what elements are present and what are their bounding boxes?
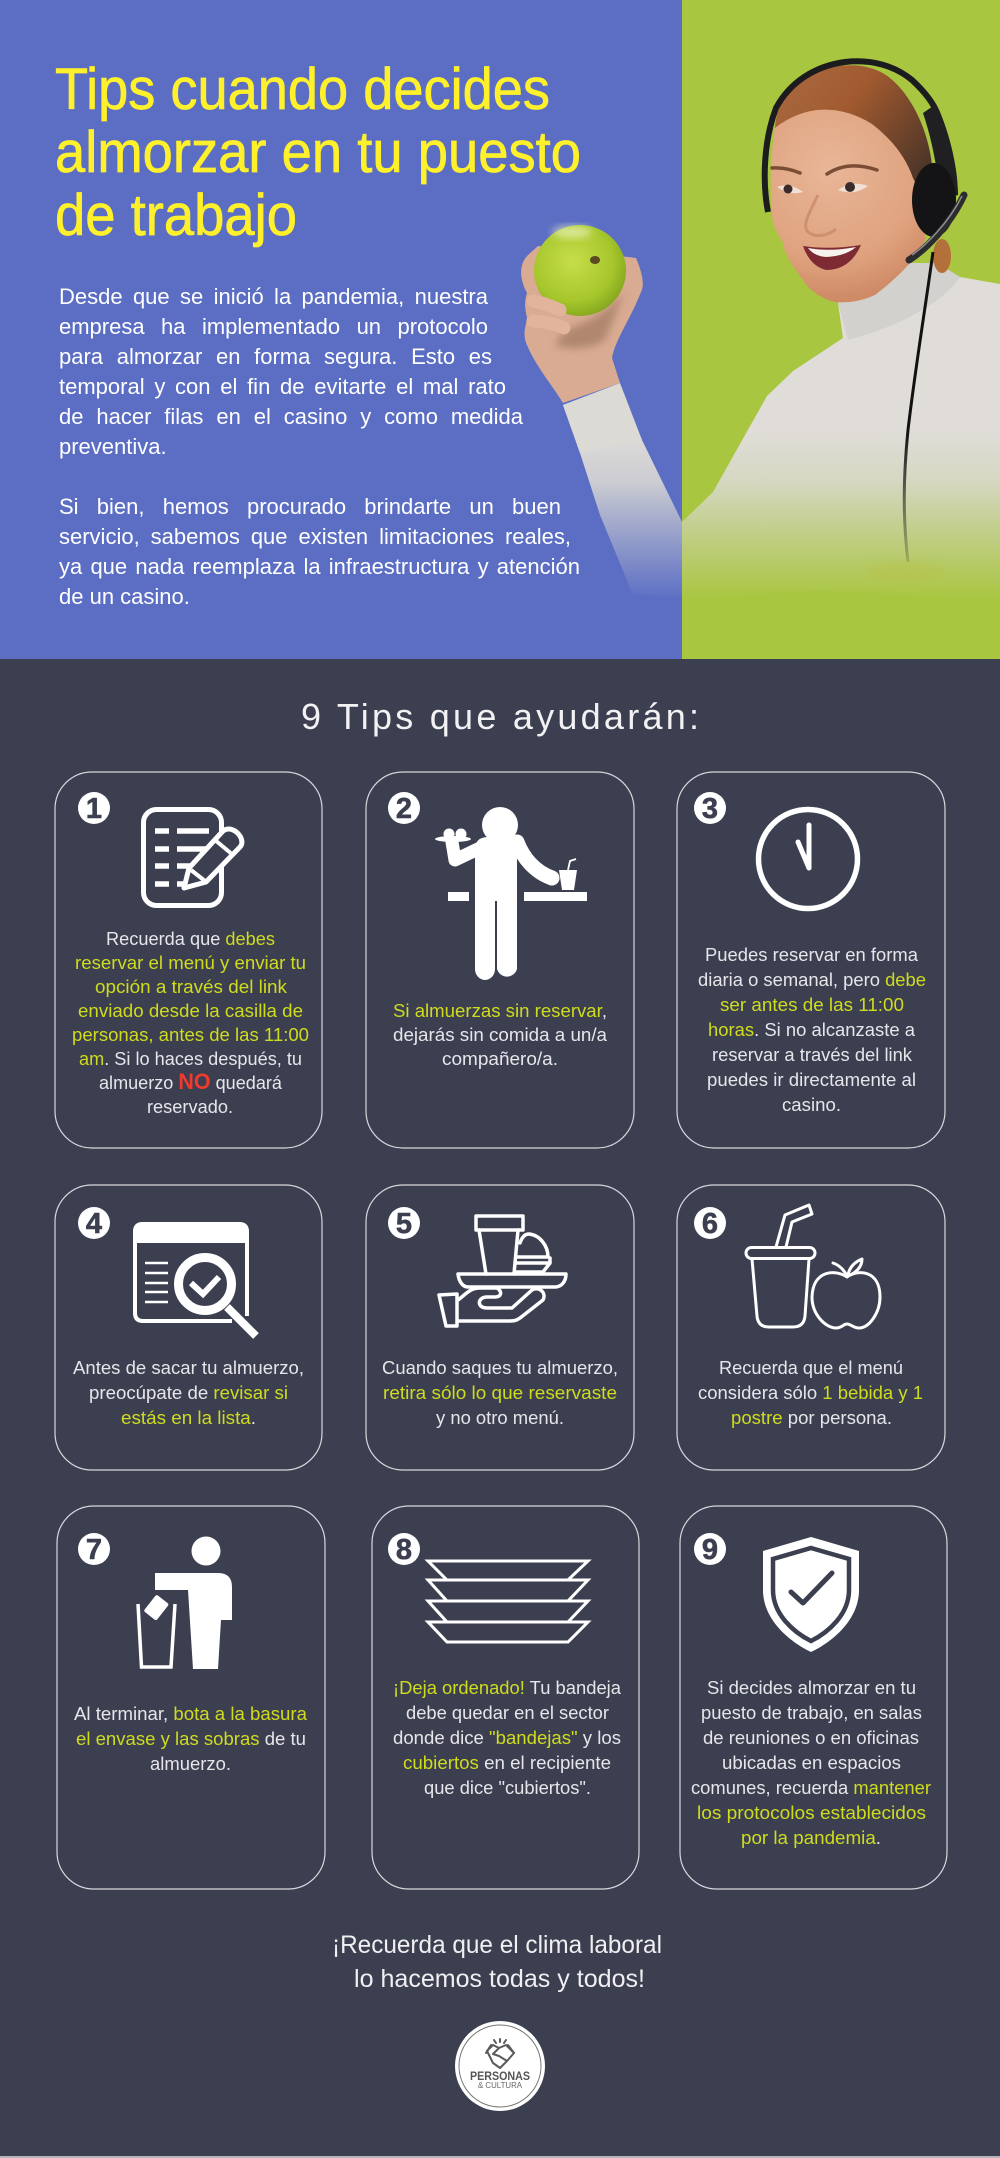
- panel: tip 2: [366, 772, 634, 1148]
- text: tip 9: los protocolos establecidos: [697, 1802, 926, 1823]
- faded hand: [863, 562, 947, 582]
- text: tip 6: [698, 1357, 923, 1428]
- text: tip 1: opción a través del link: [95, 976, 288, 997]
- text: tip 8: que dice "cubiertos".: [424, 1777, 591, 1798]
- face: [771, 105, 925, 302]
- badge: number 8: [388, 1533, 420, 1566]
- hair bun: [933, 239, 951, 273]
- badge: number 9: 9: [702, 1534, 718, 1566]
- badge: number 1: [78, 792, 110, 825]
- text: tip 9: por la pandemia.: [741, 1827, 881, 1848]
- apple: [534, 225, 626, 316]
- text: tip 1: reservado.: [147, 1096, 233, 1117]
- text: tip 4: [73, 1357, 304, 1428]
- closing message: ¡Recuerda que el clima laboral: [332, 1931, 662, 1959]
- panel: tip 1: [55, 772, 322, 1148]
- intro paragraph one: empresa ha implementado un protocolo: [59, 314, 488, 339]
- text: tip 6: postre por persona.: [731, 1407, 892, 1428]
- panel: hero blue background: [0, 0, 682, 659]
- heading: 9 tips: 9 Tips que ayudarán:: [301, 696, 699, 737]
- title: [55, 57, 581, 248]
- icon: shield with check: [763, 1537, 859, 1652]
- badge: number 2: 2: [396, 793, 412, 825]
- badge: number 2: [388, 792, 420, 825]
- text: tip 8: [393, 1677, 622, 1798]
- turtleneck: [838, 263, 960, 340]
- text: tip 7: [74, 1703, 308, 1774]
- badge: number 5: [388, 1207, 420, 1240]
- photo: woman with headset holding apple: [521, 61, 1000, 600]
- text: tip 3: ser antes de las 11:00: [720, 994, 904, 1015]
- text: tip 7: el envase y las sobras de tu: [76, 1728, 306, 1749]
- icon: window with magnifier: [133, 1222, 256, 1336]
- text: tip 9: ubicadas en espacios: [722, 1752, 901, 1773]
- text: tip 3: horas. Si no alcanzaste a: [708, 1019, 916, 1040]
- text: tip 1: almuerzo NO quedará: [99, 1069, 283, 1094]
- closing message: lo hacemos todas y todos!: [354, 1965, 645, 1993]
- eyebrows: [772, 166, 877, 174]
- text: tip 1: Recuerda que debes: [106, 928, 275, 949]
- text: tip 2: dejarás sin comida a un/a: [393, 1024, 608, 1045]
- panel: tip 3: [677, 772, 945, 1148]
- closing message: [332, 1931, 662, 1993]
- eye right: [838, 182, 868, 192]
- text: tip 9: Si decides almorzar en tu: [707, 1677, 916, 1698]
- sleeve cuff: [563, 383, 642, 453]
- fingers: [533, 301, 564, 328]
- icon: handshake: [486, 2039, 514, 2068]
- badge: number 9: [694, 1533, 726, 1566]
- badge: number 4: [78, 1207, 110, 1240]
- badge: number 3: 3: [702, 793, 718, 825]
- text: tip 4: Antes de sacar tu almuerzo,: [73, 1357, 304, 1378]
- text: tip 3: reservar a través del link: [712, 1044, 913, 1065]
- icon: clock: [758, 810, 858, 908]
- badge: number 7: [78, 1533, 110, 1566]
- intro paragraph one: de hacer filas en el casino y como medida: [59, 404, 523, 429]
- text: tip 5: y no otro menú.: [436, 1407, 564, 1428]
- text: tip 8: ¡Deja ordenado! Tu bandeja: [393, 1677, 622, 1698]
- hand: [521, 246, 643, 403]
- intro paragraph one: para almorzar en forma segura. Esto es: [59, 344, 492, 369]
- text: tip 3: casino.: [782, 1094, 841, 1115]
- text: tip 1: am. Si lo haces después, tu: [79, 1048, 302, 1069]
- text: tip 1: reservar el menú y enviar tu: [75, 952, 306, 973]
- panel: tip 6: [677, 1185, 945, 1470]
- text: tip 1: personas, antes de las 11:00: [72, 1024, 309, 1045]
- badge: number 8: 8: [396, 1534, 412, 1566]
- intro paragraph two: [59, 494, 580, 609]
- intro paragraph two: ya que nada reemplaza la infraestructura y atención: [59, 554, 580, 579]
- mic boom: [909, 195, 964, 260]
- panel: tip 9: [680, 1506, 947, 1889]
- logo: Personas y Cultura: [455, 2021, 545, 2111]
- text: tip 2: compañero/a.: [442, 1048, 558, 1069]
- logo: Personas y Cultura: PERSONAS: [470, 2071, 530, 2083]
- icon: waiter with tray and cup: [435, 807, 587, 980]
- text: tip 1: [72, 928, 309, 1117]
- text: tip 8: donde dice "bandejas" y los: [393, 1727, 621, 1748]
- headband thick right part: [923, 104, 958, 200]
- text: tip 3: puedes ir directamente al: [707, 1069, 916, 1090]
- icon: stacked trays: [428, 1561, 588, 1642]
- text: tip 3: [698, 944, 926, 1115]
- apple dimple: [590, 256, 600, 264]
- title: Tips cuando decides: [55, 57, 550, 122]
- title: de trabajo: [55, 183, 297, 248]
- badge: number 6: 6: [702, 1208, 718, 1240]
- icon: person throwing trash in bin: [138, 1536, 232, 1669]
- teeth: [808, 247, 856, 257]
- text: tip 5: Cuando saques tu almuerzo,: [382, 1357, 618, 1378]
- intro paragraph one: preventiva.: [59, 434, 167, 459]
- badge: number 4: 4: [86, 1208, 102, 1240]
- badge: number 5: 5: [396, 1208, 412, 1240]
- intro paragraph one: temporal y con el fin de evitarte el mal rato: [59, 374, 506, 399]
- text: tip 5: [382, 1357, 618, 1428]
- badge: number 7: 7: [86, 1534, 102, 1566]
- intro paragraph two: servicio, sabemos que existen limitaciones reales,: [59, 524, 571, 549]
- logo: Personas y Cultura: & CULTURA: [478, 2081, 523, 2090]
- text: tip 9: puesto de trabajo, en salas: [701, 1702, 922, 1723]
- panel: tip 7: [57, 1506, 325, 1889]
- text: tip 6: Recuerda que el menú: [719, 1357, 903, 1378]
- intro paragraph one: [59, 284, 523, 459]
- ear cup: [912, 163, 956, 237]
- palm shadow: [555, 290, 625, 348]
- text: tip 6: considera sólo 1 bebida y 1: [698, 1382, 923, 1403]
- hair: [775, 65, 932, 195]
- icon: hand holding tray with food: [439, 1216, 566, 1326]
- panel: hero green background: [682, 0, 1000, 659]
- text: tip 9: [691, 1677, 931, 1848]
- panel: tip 5: [366, 1185, 634, 1470]
- eye left: [777, 184, 803, 194]
- text: tip 1: enviado desde la casilla de: [78, 1000, 303, 1021]
- text: tip 4: preocúpate de revisar si: [89, 1382, 288, 1403]
- mic boom highlight: [912, 196, 962, 255]
- panel: tip 8: [372, 1506, 639, 1889]
- text: tip 7: almuerzo.: [150, 1753, 231, 1774]
- apple highlight: [552, 226, 592, 238]
- badge: number 6: [694, 1207, 726, 1240]
- sweater: [563, 263, 1000, 600]
- text: tip 9: de reuniones o en oficinas: [703, 1727, 919, 1748]
- mouth: [803, 245, 861, 270]
- text: tip 3: diaria o semanal, pero debe: [698, 969, 926, 990]
- text: tip 5: retira sólo lo que reservaste: [383, 1382, 617, 1403]
- text: tip 2: [393, 1000, 608, 1069]
- badge: number 3: [694, 792, 726, 825]
- title: almorzar en tu puesto: [55, 120, 581, 185]
- intro paragraph two: de un casino.: [59, 584, 190, 609]
- text: tip 9: comunes, recuerda mantener: [691, 1777, 931, 1798]
- text: tip 8: debe quedar en el sector: [406, 1702, 609, 1723]
- icon: document with pencil: [144, 810, 242, 906]
- text: tip 7: Al terminar, bota a la basura: [74, 1703, 308, 1724]
- headband: [765, 61, 955, 212]
- nose shading: [806, 195, 836, 236]
- intro paragraph one: Desde que se inició la pandemia, nuestra: [59, 284, 488, 309]
- cable: [904, 252, 933, 562]
- intro paragraph two: Si bien, hemos procurado brindarte un buen: [59, 494, 561, 519]
- text: tip 4: estás en la lista.: [121, 1407, 256, 1428]
- icon: cup and apple: [746, 1205, 880, 1328]
- panel: tip 4: [55, 1185, 322, 1470]
- text: tip 8: cubiertos en el recipiente: [403, 1752, 611, 1773]
- text: tip 2: Si almuerzas sin reservar,: [393, 1000, 607, 1021]
- badge: number 1: 1: [86, 793, 102, 825]
- text: tip 3: Puedes reservar en forma: [705, 944, 919, 965]
